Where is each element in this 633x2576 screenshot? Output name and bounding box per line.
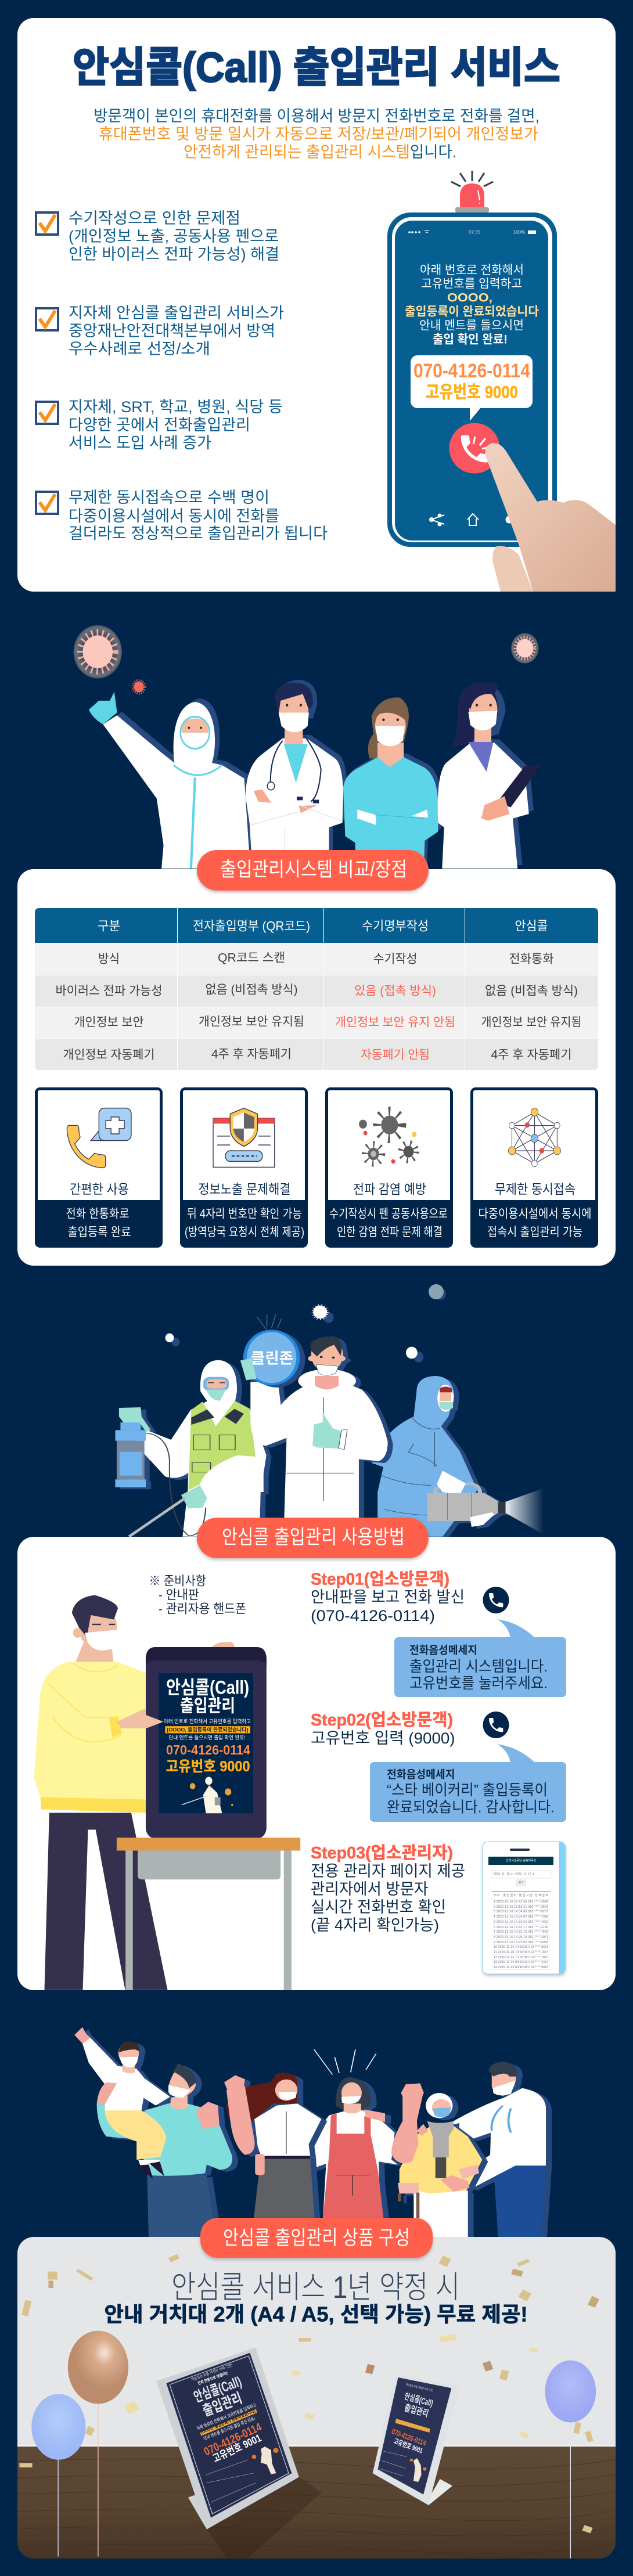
stand A4 poster text: 안내 멘트를 들으시면 출입 확인 완료! — [203, 2415, 256, 2441]
virus right — [511, 633, 538, 664]
benefit card: unlimited access: 다중이용시설에서 동시에 — [479, 1208, 591, 1220]
checklist item 4: 다중이용시설에서 동시에 전화를 — [69, 507, 279, 525]
stand A5 poster text — [390, 2383, 434, 2455]
benefit card: infection prevention: 인한 감염 전파 문제 해결 — [337, 1226, 443, 1239]
sign text: 출입관리 — [180, 1696, 235, 1716]
offer heading: 안심콜 서비스 1년 약정 시 — [171, 2270, 460, 2305]
person: man in hoodie — [450, 2062, 546, 2237]
checklist item 2 — [36, 304, 284, 358]
stand A4 poster text: 출입관리 — [200, 2390, 244, 2419]
phone instructions: OOOO, — [447, 291, 492, 304]
benefit card: infection prevention — [325, 1087, 453, 1248]
callout: phone number: 070-4126-0114 — [413, 360, 530, 382]
stand A5 poster text: 개인정보 유출 걱정은 이제 그만! — [405, 2383, 433, 2393]
hand pointing at sign — [117, 1709, 164, 1728]
benefit card: infection prevention: 전파 감염 예방 — [353, 1181, 426, 1197]
checklist item 2: 지자체 안심콜 출입관리 서비스가 — [69, 304, 284, 322]
display stand A5 — [373, 2377, 452, 2505]
comparison table: 개인정보 보안 유지됨 — [199, 1015, 304, 1029]
comparison table: 있음 (접촉 방식) — [354, 985, 436, 997]
energy lines above head — [314, 2049, 376, 2074]
heading: comparison pill: 출입관리시스템 비교/장점 — [220, 859, 407, 881]
speech bubble: voice message 2: “스타 베이커리” 출입등록이 — [387, 1781, 548, 1799]
step 02: 고유번호 입력 (9000) — [311, 1730, 455, 1747]
raised arm with fist — [391, 2083, 424, 2163]
phone instructions: 고유번호를 입력하고 — [421, 278, 522, 290]
heading: product pill — [200, 2218, 433, 2258]
phone instructions: 출입등록이 완료되었습니다 — [405, 305, 539, 318]
benefit card: infection prevention: 수기작성시 펜 공동사용으로 — [329, 1208, 448, 1220]
benefit card: data exposure: (방역당국 요청시 전체 제공) — [185, 1226, 304, 1239]
admin table data: NO. 출입일자 출입시간 전화번호 — [494, 1893, 548, 1897]
comparison table — [35, 908, 598, 1070]
person: blue suit with fogger — [372, 1376, 506, 1537]
admin table data: 7 2020-11-16 14:32:15 010-****-7542 — [494, 1930, 548, 1934]
comparison table: 자동폐기 안됨 — [361, 1049, 430, 1061]
speech bubble: voice message 2: 전화음성메세지 — [387, 1768, 455, 1781]
checklist item 2: 우수사례로 선정/소개 — [69, 340, 210, 358]
admin table data: 8 2020-11-16 14:28:10 010-****-3071 — [494, 1936, 548, 1939]
intro paragraph: 입니다. — [410, 143, 456, 161]
comparison table: 방식 — [98, 952, 120, 966]
panel: product offer — [17, 2218, 616, 2559]
step 01: 안내판을 보고 전화 발신 — [311, 1588, 465, 1606]
benefit card: data exposure: 정보노출 문제해결 — [199, 1181, 290, 1197]
phone instructions: 안내 멘트를 들으시면 — [419, 319, 524, 332]
icon: siren — [451, 171, 493, 212]
benefit card: easy use: 출입등록 완료 — [67, 1226, 131, 1239]
checklist item 3: 다양한 곳에서 전화출입관리 — [69, 416, 250, 434]
stand A4 poster text: 전화 한통으로 해결되는 — [197, 2370, 229, 2386]
table legs and drawer — [125, 1850, 292, 1990]
phone mockup — [387, 212, 557, 547]
table top — [117, 1838, 300, 1850]
person: elderly woman — [398, 2093, 482, 2237]
comparison table: 4주 후 자동폐기 — [491, 1049, 571, 1061]
heading: product pill: 안심콜 출입관리 상품 구성 — [223, 2227, 410, 2249]
stand A4 poster text: 070-4126-0114 — [202, 2420, 264, 2459]
checklist item 4 — [36, 489, 328, 542]
person: sprayer in vest — [115, 1360, 267, 1537]
checklist item 3: 지자체, SRT, 학교, 병원, 식당 등 — [69, 398, 283, 416]
stand A4 poster text: 개인정보 유출 걱정은 이제 그만! — [190, 2362, 233, 2382]
confetti — [19, 2254, 599, 2533]
step 01 — [311, 1570, 566, 1697]
sign text: 안내 멘트를 들으시면 출입 확인 완료! — [168, 1734, 245, 1741]
stand A5 poster text: 출입관리 — [404, 2402, 430, 2419]
speech bubble: voice message 2: 완료되었습니다. 감사합니다. — [387, 1799, 555, 1816]
checklist item 4: 무제한 동시접속으로 수백 명이 — [69, 489, 269, 506]
person: father and child — [74, 2027, 232, 2237]
admin page tablet: 인천시설공단 송림체육관 — [506, 1858, 536, 1862]
benefit card: unlimited access: 접속시 출입관리 가능 — [487, 1226, 582, 1239]
heading: how to use pill: 안심콜 출입관리 사용방법 — [222, 1526, 405, 1548]
intro paragraph: 방문객이 본인의 휴대전화를 이용해서 방문지 전화번호로 전화를 걸면, — [93, 107, 540, 125]
comparison table: 안심콜 — [515, 918, 548, 934]
admin page tablet: 2020. 11. 16. ▾ - 2020. 11. 17. ▾ — [494, 1873, 534, 1876]
step 02: Step02(업소방문객) — [311, 1710, 453, 1730]
step 03: (끝 4자리 확인가능) — [311, 1916, 439, 1934]
sign text: 070-4126-0114 — [166, 1742, 250, 1757]
balloons — [31, 2331, 596, 2559]
sign text: 고유번호 9000 — [166, 1759, 250, 1775]
benefit card: easy use: 간편한 사용 — [70, 1181, 129, 1197]
virus particles — [166, 1305, 423, 1363]
label: clean zone: 클린존 — [251, 1349, 293, 1367]
comparison table: 구분 — [98, 918, 120, 934]
speech bubble: voice message 1: 고유번호를 눌러주세요. — [409, 1674, 548, 1692]
comparison table: 없음 (비접촉 방식) — [206, 983, 297, 996]
illustration: medical staff — [74, 625, 542, 869]
display stand A4 — [156, 2347, 322, 2559]
phone status bar — [408, 230, 536, 235]
checklist item 1: 인한 바이러스 전파 가능성) 해결 — [69, 246, 279, 263]
person: hazmat worker — [89, 692, 255, 869]
panel: how to use — [17, 1518, 616, 1990]
illustration: man with sign and table — [34, 1595, 300, 1990]
checklist item 4: 걸더라도 정상적으로 출입관리가 됩니다 — [69, 525, 328, 542]
stand A4 poster text: 아래 번호로 전화해서 고유번호를 입력하고 — [196, 2402, 257, 2431]
checklist item 1: 수기작성으로 인한 문제점 — [69, 210, 240, 227]
admin table data: 11 2020-11-16 10:00:40 010-****-1873 — [494, 1951, 548, 1954]
illustration: disinfection crew — [115, 1305, 544, 1537]
comparison table: 개인정보 보안 유지 안됨 — [335, 1016, 455, 1029]
comparison table: 4주 후 자동폐기 — [211, 1047, 292, 1061]
step 03 — [311, 1843, 465, 1934]
admin table data: 10 2020-11-16 14:23:26 010-****-6663 — [494, 1945, 548, 1949]
admin table data: 1 2020-11-16 15:41:59 010-****-3646 — [494, 1900, 548, 1904]
heading: comparison pill — [197, 850, 429, 891]
icon: phone and medical bubble — [67, 1108, 131, 1168]
virus large — [74, 625, 122, 679]
illustration: cheering family group — [74, 2027, 546, 2237]
sign board — [146, 1642, 267, 1839]
benefit card: unlimited access: 무제한 동시접속 — [495, 1181, 576, 1197]
stand A4 poster text: 안심콜(Call) — [192, 2374, 244, 2405]
comparison table: 수기명부작성 — [362, 918, 429, 934]
admin table data — [494, 1893, 548, 1969]
speech bubble: voice message 1: 전화음성메세지 — [409, 1644, 477, 1657]
stand A5 poster text: 고유번호 9001 — [393, 2437, 424, 2455]
preparation note: - 관리자용 핸드폰 — [159, 1601, 246, 1616]
icon: phone — [483, 1587, 509, 1613]
intro paragraph: 안전하게 관리되는 출입관리 시스템 — [184, 143, 410, 161]
admin table data: 5 2020-11-16 14:32:54 010-****-4000 — [494, 1921, 548, 1924]
step 02 — [311, 1710, 566, 1822]
person: woman with fist — [224, 2073, 321, 2218]
icon: shield — [213, 1108, 275, 1167]
phone instructions: 출입 확인 완료! — [433, 333, 508, 346]
step 03: 실시간 전화번호 확인 — [311, 1898, 446, 1916]
step 01: (070-4126-0114) — [311, 1607, 435, 1624]
benefit card: unlimited access — [470, 1087, 598, 1248]
speech bubble: voice message 1 — [394, 1619, 566, 1697]
speech bubble: voice message 2 — [370, 1744, 566, 1822]
intro paragraph — [93, 107, 540, 161]
comparison table: 전화통화 — [509, 952, 554, 966]
admin table data: 6 2020-11-16 14:32:17 010-****-2145 — [494, 1926, 548, 1929]
step 01: Step01(업소방문객) — [311, 1570, 449, 1588]
admin table data: 2 2020-11-16 15:19:21 010-****-3675 — [494, 1905, 548, 1909]
virus: drifting particle — [429, 1284, 446, 1300]
person: doctor — [246, 680, 347, 869]
comparison table: 수기작성 — [373, 952, 417, 966]
step 03: 관리자에서 방문자 — [311, 1880, 429, 1898]
admin page tablet — [483, 1842, 566, 1974]
comparison table: 개인정보 보안 — [74, 1016, 144, 1029]
callout: phone number — [411, 355, 533, 421]
title: 안심콜(Call) 출입관리 서비스 — [73, 45, 560, 91]
phone status bar: 100% — [513, 230, 525, 235]
virus small red — [133, 680, 145, 693]
preparation note — [149, 1573, 246, 1616]
benefit card: easy use — [35, 1087, 163, 1248]
phone status bar: 07:35 — [469, 230, 481, 235]
benefit icons — [67, 1108, 561, 1168]
person: woman in red apron — [308, 2077, 398, 2218]
comparison table: 개인정보 보안 유지됨 — [481, 1016, 582, 1029]
icons: phone navigation — [430, 514, 513, 526]
heading: how to use pill — [197, 1518, 429, 1558]
step 03: 전용 관리자 페이지 제공 — [311, 1862, 465, 1880]
stand A4 poster text: [OOOO, 출입등록이 완료되었습니다] — [200, 2408, 256, 2435]
callout: phone number: 고유번호 9000 — [426, 383, 518, 402]
sign text: 안심콜(Call) — [166, 1677, 249, 1698]
preparation note: ※ 준비사항 — [149, 1573, 206, 1588]
checklist item 3 — [36, 398, 283, 452]
hand pressing button — [485, 443, 616, 592]
phone instructions — [405, 264, 539, 346]
checklist item 3: 서비스 도입 사례 증가 — [69, 434, 211, 452]
phone instructions: 아래 번호로 전화해서 — [420, 264, 524, 277]
checklist item 1: (개인정보 노출, 공동사용 펜으로 — [69, 228, 279, 245]
rays above sign — [257, 1314, 282, 1330]
comparison table: QR코드 스캔 — [218, 951, 285, 965]
person: doctor with clipboard — [438, 683, 542, 869]
comparison table: 바이러스 전파 가능성 — [56, 985, 163, 997]
admin table data: 9 2020-11-16 14:25:03 010-****-0086 — [494, 1941, 548, 1944]
admin table data: 12 2020-11-16 10:00:08 010-****-1873 — [494, 1956, 548, 1959]
preparation note: - 안내판 — [159, 1587, 199, 1602]
man's cuff — [458, 2164, 479, 2179]
sign text: 아래 번호로 전화해서 고유번호를 입력하고 — [164, 1718, 251, 1724]
admin table data: 13 2020-11-16 09:50:23 010-****-3412 — [494, 1961, 548, 1964]
icon: phone — [483, 1712, 509, 1738]
comparison table: 개인정보 자동폐기 — [63, 1049, 154, 1061]
admin table data: 4 2020-11-16 14:34:07 010-****-7089 — [494, 1915, 548, 1919]
admin page tablet: 검색 — [518, 1880, 524, 1885]
sign text — [164, 1677, 251, 1775]
person: thumbs up in white suit — [250, 1336, 388, 1537]
checklist item 2: 중앙재난안전대책본부에서 방역 — [69, 322, 275, 340]
hose and wand — [129, 1433, 206, 1537]
benefit card: data exposure: 뒤 4자리 번호만 확인 가능 — [187, 1208, 302, 1220]
benefit card: data exposure — [180, 1087, 308, 1248]
icon: call button — [449, 423, 499, 474]
stand A4 poster text: 고유번호 9001 — [211, 2432, 263, 2465]
panel: comparison and benefits — [17, 850, 616, 1266]
stand A4 poster text — [190, 2362, 264, 2465]
step 03: Step03(업소관리자) — [311, 1843, 453, 1862]
fogger light beam — [506, 1488, 544, 1534]
stand A5 poster text: 070-4126-0114 — [390, 2427, 427, 2448]
panel: service intro — [17, 18, 616, 592]
speech bubble: voice message 1: 출입관리 시스템입니다. — [409, 1658, 548, 1675]
checklist item 1 — [36, 210, 279, 263]
intro paragraph: 휴대폰번호 및 방문 일시가 자동으로 저장/보관/폐기되어 개인정보가 — [99, 125, 538, 143]
comparison table: 없음 (비접촉 방식) — [485, 985, 578, 997]
person — [34, 1595, 168, 1990]
benefit card: easy use: 전화 한통화로 — [66, 1208, 129, 1220]
person: nurse — [343, 697, 441, 869]
admin table data: 3 2020-11-16 14:34:09 010-****-9237 — [494, 1910, 548, 1914]
icon: viruses — [359, 1114, 416, 1163]
icon: network — [508, 1108, 561, 1167]
sign text: [OOOO, 출입등록이 완료되었습니다] — [167, 1727, 249, 1732]
stand A5 poster text: 안심콜(Call) — [404, 2391, 434, 2409]
sign: clean zone — [240, 1331, 298, 1384]
offer subheading: 안내 거치대 2개 (A4 / A5, 선택 가능) 무료 제공! — [105, 2303, 527, 2326]
comparison table: 전자출입명부 (QR코드) — [193, 918, 310, 934]
admin table data: 14 2020-11-16 09:46:45 010-****-9028 — [494, 1966, 548, 1969]
